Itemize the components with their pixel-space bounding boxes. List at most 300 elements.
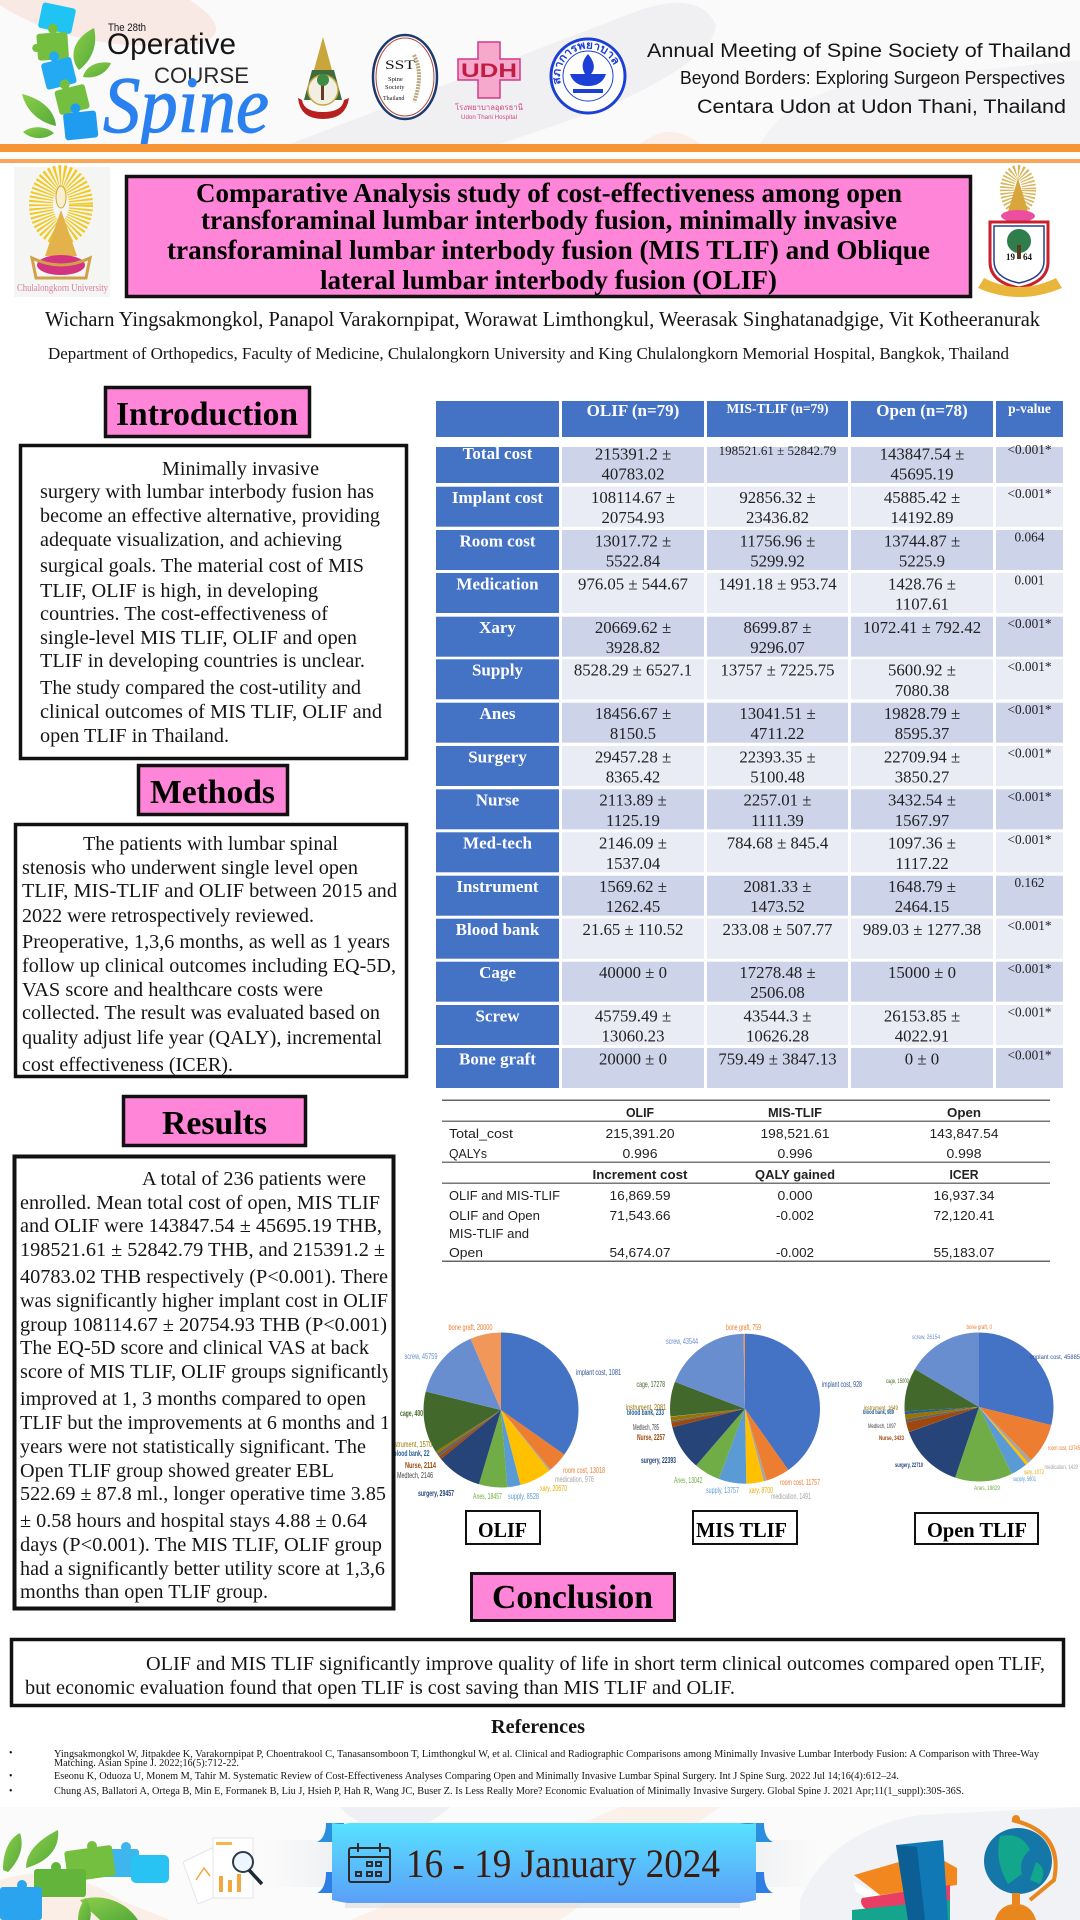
- table: cost-effectiveness: Total_cost: [449, 1126, 513, 1141]
- row: Bone graft: 20000 ± 0: [599, 1049, 667, 1068]
- row: Medication: [436, 572, 1063, 614]
- row: Anes: 4711.22: [751, 724, 804, 743]
- panel: results: days (P<0.001). The MIS TLIF, OLIF group: [20, 1534, 382, 1556]
- references list: Matching. Asian Spine J. 2022;16(5):712-22.: [54, 1758, 239, 1769]
- row: Screw: Screw: [475, 1006, 520, 1025]
- row: Room cost: 11756.96 ±: [740, 531, 815, 550]
- table: cost-effectiveness: 143,847.54: [930, 1126, 998, 1141]
- panel: results: The EQ-5D score and clinical VAS at back: [20, 1337, 369, 1359]
- row: Screw: 45759.49 ±: [595, 1006, 671, 1025]
- pie chart: OLIF: screw, 45759: [404, 1352, 438, 1361]
- row: Med-tech: 784.68 ± 845.4: [727, 834, 829, 853]
- table: cost-effectiveness: ICER: [950, 1167, 979, 1182]
- row: Supply: 8528.29 ± 6527.1: [574, 661, 692, 680]
- header banner: [0, 0, 1080, 150]
- row: Bone graft: 759.49 ± 3847.13: [718, 1049, 837, 1068]
- panel: conclusion: [12, 1640, 1064, 1706]
- pie chart: MIS TLIF: bone graft, 759: [726, 1323, 761, 1332]
- panel: introduction: Minimally invasive: [162, 458, 319, 480]
- row: Surgery: <0.001*: [1007, 746, 1052, 760]
- authors: Wicharn Yingsakmongkol, Panapol Varakornpipat, Worawat Limthongkul, Weerasak Singhatanadgige, Vit Kotheeranurak: [45, 307, 1040, 331]
- row: Room cost: [436, 530, 1063, 570]
- heading: Conclusion: Conclusion: [492, 1579, 653, 1616]
- panel: results: was significantly higher implant cost in OLIF: [20, 1290, 388, 1312]
- row: Total cost: <0.001*: [1007, 442, 1052, 457]
- row: Med-tech: 1097.36 ±: [888, 834, 956, 853]
- footer banner: [0, 1807, 1080, 1920]
- row: Total cost: [436, 442, 1063, 483]
- row: Implant cost: 23436.82: [746, 508, 809, 527]
- orange header stripes: [0, 144, 1080, 163]
- row: Med-tech: 1537.04: [606, 854, 661, 873]
- pie chart: Open TLIF: supply, 5601: [1013, 1477, 1036, 1483]
- row: Nurse: 1567.97: [895, 811, 949, 830]
- row: Nurse: 1111.39: [751, 811, 804, 830]
- pie chart: Open TLIF: [863, 1325, 1080, 1492]
- heading: Results: Results: [162, 1105, 267, 1142]
- row: Implant cost: 14192.89: [891, 508, 953, 527]
- logo: nursing council: สภาการพยาบาล: [553, 42, 618, 84]
- heading: Results: [124, 1096, 306, 1146]
- row: Surgery: 29457.28 ±: [595, 747, 671, 766]
- row: Anes: 18456.67 ±: [595, 704, 671, 723]
- row: Medication: 1491.18 ± 953.74: [718, 574, 837, 593]
- row: Instrument: Instrument: [456, 877, 539, 896]
- row: Supply: Supply: [472, 661, 524, 680]
- table: cost comparison: [436, 401, 1063, 1088]
- row: Blood bank: [436, 918, 1063, 959]
- pie chart: Open TLIF: xary, 1072: [1024, 1470, 1044, 1476]
- logo: Chulalongkorn University: [14, 167, 110, 297]
- row: Nurse: 2113.89 ±: [599, 791, 667, 810]
- meeting theme: Beyond Borders: Exploring Surgeon Perspectives: [680, 68, 1065, 88]
- panel: introduction: surgery with lumbar interbody fusion has: [40, 481, 374, 503]
- pie chart: MIS TLIF: xary, 8700: [749, 1486, 773, 1495]
- pie chart: OLIF: Nurse, 2114: [405, 1461, 436, 1470]
- table: cost-effectiveness: -0.002: [776, 1245, 814, 1260]
- title panel: lateral lumbar interbody fusion (OLIF): [320, 265, 777, 295]
- table: cost-effectiveness: OLIF: [626, 1105, 654, 1120]
- row: Nurse: <0.001*: [1007, 789, 1052, 804]
- logo text: Operative: Operative: [107, 28, 236, 61]
- panel: introduction: TLIF, OLIF is high, in developing: [40, 580, 318, 602]
- chart caption: MIS TLIF: MIS TLIF: [696, 1518, 787, 1542]
- row: Anes: 8595.37: [895, 724, 949, 743]
- row: Screw: 13060.23: [602, 1026, 664, 1046]
- row: Blood bank: 989.03 ± 1277.38: [863, 920, 981, 939]
- table: cost-effectiveness: -0.002: [776, 1208, 814, 1223]
- title panel: transforaminal lumbar interbody fusion (MIS TLIF) and Oblique: [167, 235, 930, 265]
- logo: spine society of Thailand: [373, 35, 437, 119]
- row: Screw: <0.001*: [1007, 1004, 1052, 1020]
- row: Blood bank: Blood bank: [456, 920, 540, 939]
- row: Surgery: 22709.94 ±: [884, 747, 960, 766]
- panel: methods: [16, 824, 406, 1076]
- row: Room cost: 13744.87 ±: [884, 531, 960, 550]
- row: Blood bank: 233.08 ± 507.77: [723, 920, 832, 939]
- icon: footer leaves: [3, 1830, 138, 1920]
- pie chart: OLIF: Medtech, 2146: [397, 1471, 433, 1480]
- table: cost-effectiveness: QALYs: [449, 1146, 487, 1161]
- pie chart: MIS TLIF: Nurse, 2257: [637, 1433, 665, 1442]
- pie chart: MIS TLIF: Medtech, 785: [633, 1423, 659, 1432]
- table: cost-effectiveness: [442, 1100, 1050, 1262]
- references list: Yingsakmongkol W, Jitpakdee K, Varakornpipat P, Choentrakool C, Tanasansomboon T, Limthongkul W, et al. Clinical and Radiographic Comparisons among Minimally Invasive Lumbar Interbody Fusion: A Comparison with Three-Way: [54, 1749, 1040, 1760]
- panel: results: score of MIS TLIF, OLIF groups significantly: [20, 1361, 392, 1383]
- logo: spine society of Thailand: Thailand: [383, 96, 404, 102]
- row: Medication: 1428.76 ±: [888, 574, 956, 593]
- icon: puzzle spine: [31, 2, 98, 141]
- row: Supply: 13757 ± 7225.75: [720, 661, 835, 680]
- table: cost-effectiveness: 16,869.59: [610, 1188, 670, 1203]
- row: Total cost: 198521.61 ± 52842.79: [719, 443, 836, 458]
- row: Implant cost: [436, 486, 1063, 527]
- pie chart: Open TLIF: screw, 26154: [912, 1335, 941, 1341]
- row: Med-tech: <0.001*: [1007, 832, 1052, 847]
- panel: methods: follow up clinical outcomes including EQ-5D,: [22, 955, 396, 977]
- row: Instrument: [436, 875, 1063, 916]
- table: cost-effectiveness: MIS-TLIF: [768, 1105, 822, 1120]
- pie chart: Open TLIF: Medtech, 1097: [868, 1424, 896, 1430]
- logo text: The 28th: The 28th: [108, 22, 146, 34]
- row: Medication: 1107.61: [895, 594, 949, 614]
- panel: methods: Preoperative, 1,3,6 months, as well as 1 years: [22, 931, 390, 953]
- logo: Department of Orthopedics: 19: [1006, 252, 1016, 262]
- row: Med-tech: [436, 832, 1063, 873]
- row: Anes: <0.001*: [1007, 702, 1052, 717]
- heading: Conclusion: [472, 1574, 674, 1620]
- table: cost-effectiveness: 55,183.07: [934, 1245, 994, 1260]
- panel: methods: collected. The result was evaluated based on: [22, 1002, 380, 1024]
- table: cost-effectiveness: 71,543.66: [610, 1208, 670, 1223]
- panel: methods: 2022 were retrospectively reviewed.: [22, 905, 314, 927]
- pie chart: Open TLIF: surgery, 22710: [895, 1463, 923, 1469]
- logo: Udon Thani Hospital: Udon Thani Hospital: [461, 115, 517, 121]
- row: Surgery: 5100.48: [750, 768, 805, 786]
- row: Room cost: Room cost: [459, 531, 536, 550]
- heading: Introduction: [106, 388, 310, 436]
- row: Nurse: 1125.19: [606, 811, 660, 830]
- chart caption: OLIF: OLIF: [478, 1518, 527, 1542]
- pie chart: OLIF: medication, 976: [555, 1475, 594, 1484]
- table: cost-effectiveness: Increment cost: [592, 1167, 688, 1182]
- references list: •: [9, 1771, 13, 1782]
- panel: methods: stenosis who underwent single level open: [22, 857, 358, 879]
- references list: •: [9, 1786, 13, 1797]
- panel: methods: The patients with lumbar spinal: [83, 833, 338, 855]
- row: Bone graft: [436, 1048, 1063, 1088]
- table: cost-effectiveness: 215,391.20: [606, 1126, 674, 1141]
- row: Anes: [436, 702, 1063, 743]
- pie chart: Open TLIF: bone graft, 0: [966, 1325, 992, 1331]
- logo: Udon Thani Hospital: UDH: [461, 61, 517, 82]
- pie chart: MIS TLIF: [626, 1323, 862, 1501]
- pie chart: OLIF: blood bank, 22: [394, 1449, 430, 1458]
- date text: 16 - 19 January 2024: [406, 1841, 720, 1886]
- icon: books: [852, 1840, 957, 1920]
- pie chart: Open TLIF: Nurse, 3433: [879, 1436, 904, 1442]
- row: Total cost: 215391.2 ±: [595, 444, 671, 463]
- table: cost-effectiveness: 16,937.34: [934, 1188, 994, 1203]
- table header row: [436, 401, 1063, 437]
- row: Implant cost: <0.001*: [1007, 486, 1052, 501]
- pie chart: Open TLIF: instrument, 1649: [864, 1406, 898, 1412]
- logo: nursing council: [550, 38, 626, 114]
- row: Xary: 20669.62 ±: [595, 618, 671, 637]
- row: Screw: 43544.3 ±: [744, 1006, 811, 1025]
- row: Surgery: 3850.27: [895, 768, 949, 786]
- row: Cage: [436, 961, 1063, 1002]
- panel: results: months than open TLIF group.: [20, 1581, 268, 1603]
- row: Nurse: 2257.01 ±: [744, 791, 811, 810]
- row: Cage: Cage: [479, 963, 516, 982]
- panel: methods: quality adjust life year (QALY), incremental: [22, 1027, 382, 1049]
- panel: results: 522.69 ± 87.8 ml., longer operative time 3.85: [20, 1483, 386, 1505]
- pie chart: MIS TLIF: surgery, 22393: [641, 1456, 676, 1465]
- pie chart: OLIF: [390, 1323, 621, 1501]
- chart caption: MIS TLIF: [693, 1511, 797, 1544]
- row: Med-tech: 1117.22: [895, 854, 949, 873]
- row: Med-tech: Med-tech: [463, 834, 532, 853]
- row: Screw: 10626.28: [746, 1026, 809, 1046]
- row: Xary: 8699.87 ±: [744, 618, 811, 637]
- icon: report with magnifier: [183, 1838, 262, 1904]
- logo: Udon Thani Hospital: โรงพยาบาลอุดรธานี: [455, 102, 524, 112]
- panel: results: [14, 1156, 394, 1608]
- table header row: Open (n=78): [876, 401, 968, 420]
- panel: results: TLIF but the improvements at 6 months and 1: [20, 1412, 390, 1434]
- table: cost-effectiveness: OLIF and Open: [449, 1208, 540, 1223]
- row: Xary: Xary: [479, 618, 516, 637]
- panel: conclusion: OLIF and MIS TLIF significantly improve quality of life in short term clinical outcomes compared open TLIF,: [146, 1653, 1045, 1675]
- logo: spine society of Thailand: SST: [385, 57, 415, 72]
- table: cost-effectiveness: 72,120.41: [934, 1208, 994, 1223]
- pie chart: MIS TLIF: screw, 43544: [666, 1337, 698, 1346]
- title panel: transforaminal lumbar interbody fusion, minimally invasive: [201, 205, 897, 235]
- icon: leaves: [22, 28, 111, 138]
- pie chart: OLIF: surgery, 29457: [418, 1489, 454, 1498]
- pie chart: MIS TLIF: room cost, 11757: [780, 1478, 820, 1487]
- date ribbon: [317, 1823, 773, 1903]
- row: Total cost: 40783.02: [602, 464, 664, 483]
- panel: methods: TLIF, MIS-TLIF and OLIF between 2015 and: [22, 880, 397, 902]
- row: Bone graft: 0 ± 0: [905, 1049, 939, 1068]
- row: Medication: Medication: [456, 574, 539, 593]
- logo: royal emblem: [298, 37, 349, 119]
- panel: results: A total of 236 patients were: [142, 1168, 366, 1190]
- references list: [9, 1748, 1040, 1797]
- row: Screw: [436, 1004, 1063, 1046]
- row: Implant cost: 92856.32 ±: [739, 488, 816, 507]
- pie chart: OLIF: cage, 400: [400, 1409, 423, 1418]
- logo: Chulalongkorn University: Chulalongkorn University: [17, 283, 109, 294]
- row: Instrument: 2464.15: [895, 897, 949, 916]
- pie chart: OLIF: xary, 20670: [540, 1484, 567, 1493]
- panel: introduction: TLIF in developing countries is unclear.: [40, 650, 365, 672]
- row: Cage: 17278.48 ±: [739, 963, 816, 982]
- references heading: References: [491, 1716, 585, 1738]
- logo text: Spine: Spine: [103, 62, 269, 150]
- row: Cage: 40000 ± 0: [599, 963, 667, 982]
- row: Surgery: 8365.42: [606, 768, 660, 786]
- panel: methods: cost effectiveness (ICER).: [22, 1054, 233, 1076]
- pie chart: MIS TLIF: Anes, 13042: [674, 1476, 703, 1485]
- pie chart: MIS TLIF: blood bank, 233: [627, 1408, 664, 1417]
- row: Surgery: [436, 746, 1063, 786]
- table: cost-effectiveness: 198,521.61: [760, 1126, 830, 1141]
- row: Room cost: 13017.72 ±: [595, 531, 671, 550]
- table: cost-effectiveness: 0.998: [946, 1146, 982, 1161]
- panel: results: group 108114.67 ± 20754.93 THB (P<0.001): [20, 1314, 387, 1336]
- row: Room cost: 5522.84: [606, 552, 661, 570]
- panel: results: ± 0.58 hours and hospital stays 4.88 ± 0.64: [20, 1510, 367, 1532]
- pie chart: MIS TLIF: instrument, 2081: [626, 1403, 666, 1412]
- row: Medication: 0.001: [1015, 572, 1044, 588]
- chart caption: Open TLIF: [915, 1513, 1038, 1544]
- title panel: [126, 176, 970, 296]
- heading: Methods: Methods: [150, 774, 275, 811]
- row: Implant cost: 45885.42 ±: [884, 488, 960, 507]
- row: Anes: 8150.5: [610, 724, 656, 743]
- pie chart: OLIF: supply, 8528: [508, 1492, 539, 1501]
- panel: conclusion: but economic evaluation found that open TLIF is cost saving than MIS TLIF and OLIF.: [25, 1677, 735, 1699]
- icon: globe: [984, 1815, 1056, 1920]
- row: Supply: <0.001*: [1007, 659, 1052, 674]
- row: Total cost: Total cost: [463, 444, 533, 463]
- pie chart: Open TLIF: cage, 15000: [886, 1379, 909, 1385]
- row: Cage: 2506.08: [750, 983, 805, 1002]
- row: Surgery: Surgery: [468, 747, 527, 766]
- row: Supply: 5600.92 ±: [888, 661, 956, 680]
- pie chart: OLIF: bone graft, 20000: [448, 1323, 493, 1332]
- icon: calendar: [349, 1843, 390, 1882]
- panel: introduction: surgical goals. The material cost of MIS: [40, 555, 364, 577]
- row: Anes: 13041.51 ±: [739, 704, 816, 723]
- row: Total cost: 45695.19: [891, 464, 953, 483]
- panel: introduction: adequate visualization, and achieving: [40, 529, 342, 551]
- row: Instrument: 0.162: [1015, 875, 1044, 890]
- heading: Introduction: Introduction: [116, 396, 298, 433]
- row: Implant cost: Implant cost: [452, 488, 543, 507]
- panel: results: and OLIF were 143847.54 ± 45695.19 THB,: [20, 1215, 382, 1237]
- row: Anes: Anes: [480, 704, 516, 723]
- ribbon tails: [262, 1840, 820, 1908]
- row: Xary: [436, 616, 1063, 657]
- meeting title: Annual Meeting of Spine Society of Thailand: [647, 41, 1071, 62]
- row: Room cost: 0.064: [1015, 530, 1045, 544]
- row: Nurse: Nurse: [476, 791, 520, 810]
- table header row: MIS-TLIF (n=79): [726, 401, 829, 416]
- row: Supply: 7080.38: [895, 681, 949, 700]
- chart caption: OLIF: [466, 1511, 540, 1544]
- pie chart: Open TLIF: blood bank, 989: [863, 1410, 894, 1416]
- row: Nurse: [436, 789, 1063, 830]
- table: cost-effectiveness: Open: [947, 1105, 981, 1120]
- panel: introduction: countries. The cost-effectiveness of: [40, 603, 328, 625]
- panel: introduction: The study compared the cost-utility and: [40, 677, 361, 699]
- row: Medication: 976.05 ± 544.67: [578, 574, 688, 593]
- logo text: COURSE: COURSE: [154, 63, 249, 88]
- chart caption: Open TLIF: Open TLIF: [927, 1518, 1027, 1542]
- row: Instrument: 1648.79 ±: [888, 877, 956, 896]
- row: Cage: <0.001*: [1007, 961, 1052, 976]
- row: Xary: 3928.82: [606, 638, 660, 657]
- panel: introduction: [20, 446, 406, 758]
- logo: Udon Thani Hospital: [455, 42, 524, 121]
- meeting venue: Centara Udon at Udon Thani, Thailand: [697, 97, 1066, 118]
- pie chart: MIS TLIF: cage, 17278: [636, 1380, 665, 1389]
- table: cost-effectiveness: MIS-TLIF and: [449, 1226, 529, 1241]
- panel: introduction: open TLIF in Thailand.: [40, 725, 229, 747]
- panel: results: 198521.61 ± 52842.79 THB, and 215391.2 ±: [20, 1239, 385, 1261]
- pie chart: MIS TLIF: medication, 1491: [771, 1492, 811, 1501]
- row: Bone graft: <0.001*: [1007, 1048, 1052, 1062]
- pie chart: MIS TLIF: supply, 13757: [706, 1486, 739, 1495]
- references list: Eseonu K, Oduoza U, Monem M, Tahir M. Systematic Review of Cost-Effectiveness Analyses Comparing Open and Minimally Invasive Lumbar Spinal Surgery. Int J Spine Surg. 2022 Jul 14;16(4):612–24.: [54, 1771, 899, 1782]
- row: Anes: 19828.79 ±: [884, 704, 960, 723]
- row: Total cost: 143847.54 ±: [880, 444, 964, 463]
- icon: footer puzzle: [0, 1841, 169, 1920]
- table: cost-effectiveness: Open: [449, 1245, 483, 1260]
- table: cost-effectiveness: 0.996: [622, 1146, 658, 1161]
- row: Med-tech: 2146.09 ±: [599, 834, 667, 853]
- row: Instrument: 1473.52: [750, 897, 805, 916]
- row: Blood bank: 21.65 ± 110.52: [583, 920, 683, 939]
- panel: results: had a significantly better utility score at 1,3,6: [20, 1558, 385, 1580]
- pie chart: OLIF: Anes, 18457: [473, 1492, 502, 1501]
- row: Instrument: 1569.62 ±: [599, 877, 667, 896]
- row: Supply: [436, 659, 1063, 700]
- row: Xary: 9296.07: [750, 638, 805, 657]
- panel: results: years were not statistically significant. The: [20, 1436, 366, 1458]
- row: Instrument: 2081.33 ±: [744, 877, 811, 896]
- references list: Chung AS, Ballatori A, Ortega B, Min E, Formanek B, Liu J, Hsieh P, Hah R, Wang JC, Buser Z. Is Less Really More? Economic Evaluation of Minimally Invasive Surgery. Global Spine J. 2021 Apr;11(1_suppl):30S-36S.: [54, 1786, 964, 1797]
- row: Instrument: 1262.45: [606, 897, 660, 916]
- row: Bone graft: Bone graft: [459, 1049, 536, 1068]
- logo: Department of Orthopedics: 64: [1023, 252, 1032, 262]
- table header row: p-value: [1008, 401, 1051, 416]
- row: Nurse: 3432.54 ±: [888, 791, 956, 810]
- table: cost-effectiveness: 0.000: [778, 1188, 812, 1203]
- panel: introduction: become an effective alternative, providing: [40, 505, 380, 527]
- panel: results: enrolled. Mean total cost of open, MIS TLIF: [20, 1192, 380, 1214]
- row: Implant cost: 108114.67 ±: [591, 488, 675, 507]
- affiliation: Department of Orthopedics, Faculty of Medicine, Chulalongkorn University and King Chulalongkorn Memorial Hospital, Bangkok, Thailand: [48, 344, 1010, 363]
- logo: spine society of Thailand: Society: [385, 84, 405, 91]
- panel: introduction: clinical outcomes of MIS TLIF, OLIF and: [40, 701, 382, 723]
- row: Implant cost: 20754.93: [602, 508, 664, 527]
- logo: Department of Orthopedics: [978, 172, 1062, 297]
- row: Xary: 1072.41 ± 792.42: [863, 618, 981, 637]
- row: Screw: 26153.85 ±: [884, 1006, 960, 1025]
- references list: •: [9, 1748, 13, 1759]
- panel: results: 40783.02 THB respectively (P<0.001). There: [20, 1266, 388, 1288]
- table header row: OLIF (n=79): [587, 401, 679, 420]
- pie chart: Open TLIF: Anes, 19829: [974, 1486, 1001, 1492]
- title panel: Comparative Analysis study of cost-effectiveness among open: [196, 178, 902, 208]
- row: Cage: 15000 ± 0: [888, 963, 956, 982]
- panel: results: improved at 1, 3 months compared to open: [20, 1388, 366, 1410]
- pie chart: MIS TLIF: implant cost, 928: [822, 1380, 862, 1389]
- pie chart: OLIF: room cost, 13018: [563, 1466, 605, 1475]
- row: Xary: <0.001*: [1007, 616, 1052, 631]
- row: Screw: 4022.91: [895, 1026, 949, 1046]
- row: Surgery: 22393.35 ±: [739, 747, 816, 766]
- panel: methods: VAS score and healthcare costs were: [22, 979, 323, 1001]
- row: Blood bank: <0.001*: [1007, 918, 1052, 933]
- table: cost-effectiveness: 0.996: [778, 1146, 812, 1161]
- table: cost-effectiveness: QALY gained: [755, 1167, 835, 1182]
